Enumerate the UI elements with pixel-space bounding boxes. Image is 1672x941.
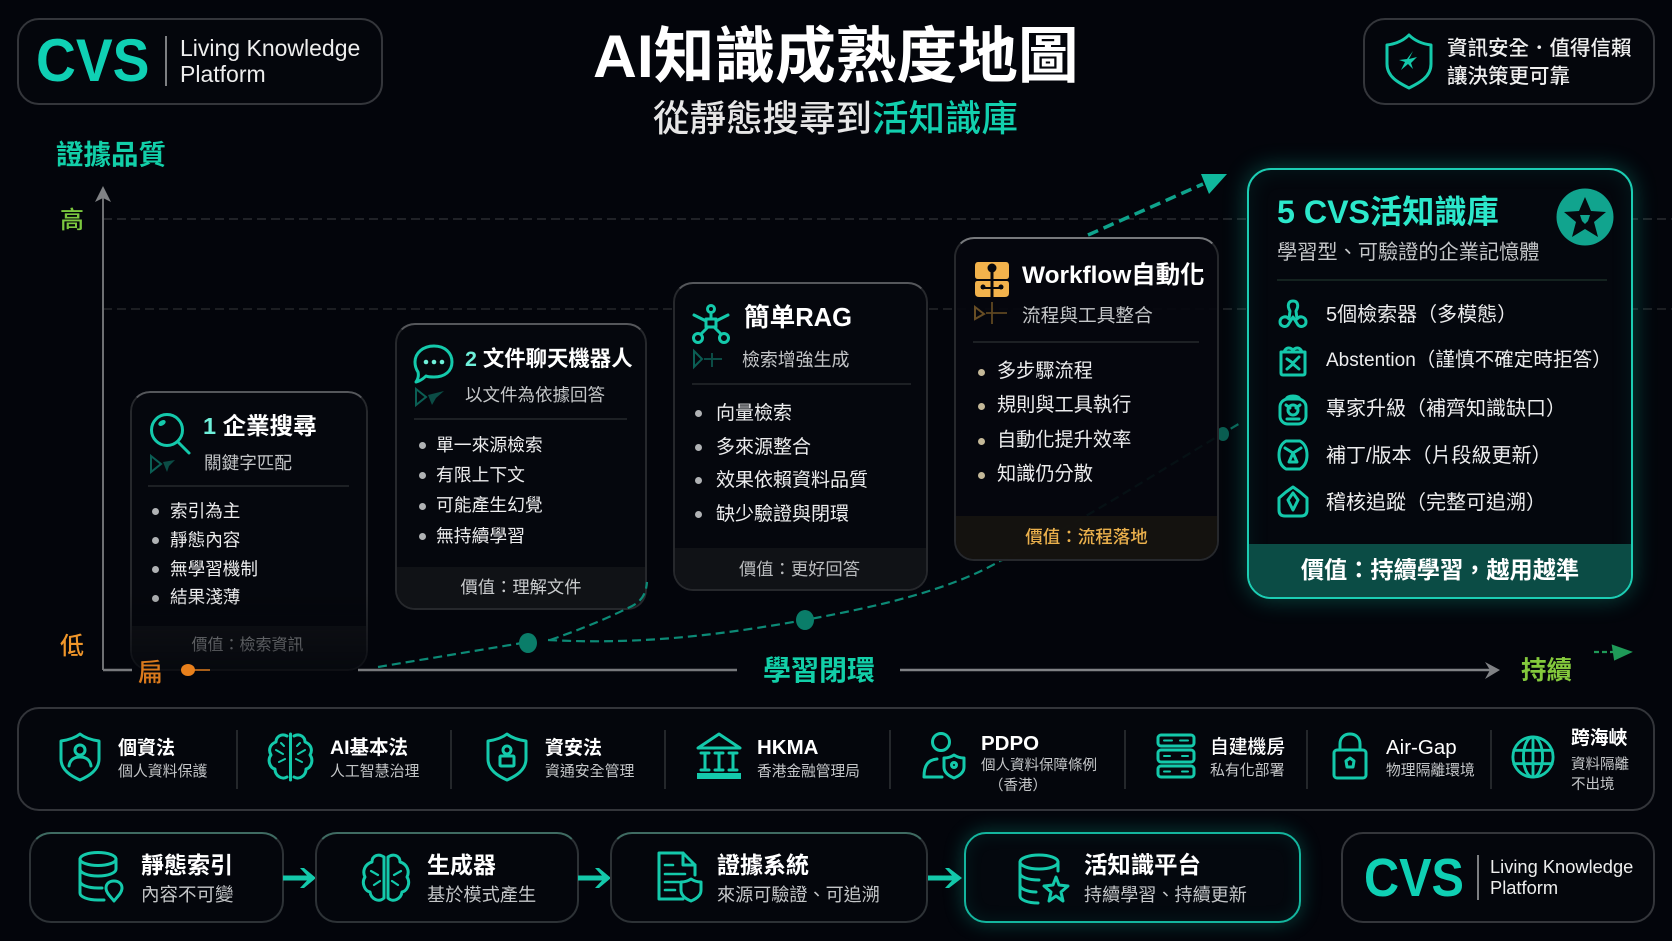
security badge panel — [1363, 18, 1655, 105]
item title: 個資法 — [118, 738, 175, 759]
icon: document with shield — [657, 851, 703, 903]
panel: stage 1 enterprise search — [130, 391, 368, 671]
item title: 資安法 — [545, 738, 602, 759]
panel: stage 3 simple RAG — [673, 282, 928, 591]
value strip: 價值：檢索資訊 — [191, 637, 304, 654]
bullet list — [978, 360, 1131, 485]
item subtitle: 個人資料保護 — [118, 764, 207, 780]
item title: PDPO — [981, 732, 1039, 755]
icon: faint marker — [415, 387, 444, 407]
item subtitle: 私有化部署 — [1210, 763, 1284, 779]
panel: static index — [29, 832, 284, 923]
item subtitle: 資料隔離 — [1571, 757, 1629, 773]
y axis title: 證據品質 — [56, 139, 166, 170]
item subtitle: 來源可驗證、可追溯 — [717, 885, 880, 905]
icon: bank — [696, 732, 742, 779]
icon: shield with lock — [486, 732, 528, 782]
icon: audit frame — [1278, 486, 1308, 518]
icon: globe — [1511, 735, 1555, 779]
bullet list: 單一來源檢索 — [436, 435, 543, 455]
item title: 靜態索引 — [141, 852, 233, 878]
item subtitle: 不出境 — [1571, 777, 1614, 793]
security text — [1447, 37, 1632, 88]
value strip: 價值：更好回答 — [739, 559, 860, 579]
stage subtitle: 檢索增強生成 — [742, 350, 849, 370]
item title: HKMA — [757, 736, 818, 759]
icon: retriever knot — [1278, 300, 1308, 328]
y axis high label: 高 — [60, 207, 84, 234]
item subtitle: 物理隔離環境 — [1386, 763, 1475, 779]
value strip — [397, 567, 645, 608]
upward dashed arrow — [1088, 174, 1227, 235]
bullet list: 向量檢索 — [716, 403, 792, 424]
bullet list — [419, 435, 543, 546]
title: AI知識成熟度地圖 — [593, 22, 1079, 90]
bullet list — [695, 402, 868, 525]
growth curve dashed — [378, 422, 1242, 667]
bullet list: 結果淺薄 — [170, 587, 240, 607]
x axis centre label: 學習閉環 — [763, 655, 875, 686]
x axis end label: 持續 — [1521, 657, 1572, 685]
logo divider — [165, 36, 167, 86]
bullet list: 缺少驗證與閉環 — [716, 504, 849, 525]
compliance: AI basic law — [268, 732, 419, 782]
bullet list: 可能產生幻覺 — [436, 495, 543, 515]
value strip: 價值：流程落地 — [1025, 527, 1148, 547]
logo tagline — [1490, 856, 1633, 898]
feature text: 稽核追蹤（完整可追溯） — [1326, 492, 1546, 514]
icon: expert frame — [1278, 394, 1308, 426]
icon: database with star — [1018, 853, 1070, 905]
compliance: cross-strait — [1509, 725, 1639, 795]
panel: living knowledge platform — [964, 832, 1301, 923]
security text: 讓決策更可靠 — [1447, 65, 1570, 88]
panel: stage 4 workflow automation — [954, 237, 1219, 561]
compliance: cybersecurity law — [486, 732, 634, 782]
value strip — [956, 516, 1217, 559]
item subtitle: 個人資料保障條例 — [981, 758, 1097, 774]
feature: audit trail — [1278, 486, 1546, 518]
logo: CVS Living Knowledge Platform (top left) — [17, 18, 383, 105]
icon: database with pin — [78, 851, 124, 903]
panel: compliance strip — [17, 707, 1655, 811]
x axis arrow — [900, 662, 1500, 679]
bullet list: 無持續學習 — [436, 526, 525, 546]
icon: network nodes — [692, 304, 730, 344]
logo divider — [1477, 855, 1479, 900]
value strip — [675, 548, 926, 589]
security text: 資訊安全．值得信賴 — [1447, 37, 1632, 60]
x axis start label: 扁 — [138, 659, 163, 687]
subtitle: 從靜態搜尋到活知識庫 — [653, 98, 1018, 139]
icon: shield — [1386, 33, 1432, 90]
bullet list — [152, 502, 257, 604]
bullet list: 索引為主 — [170, 501, 240, 521]
bullet list: 規則與工具執行 — [997, 395, 1131, 416]
icon: faint orange marker — [974, 302, 1007, 324]
bullet list: 有限上下文 — [436, 465, 525, 485]
item title: Air-Gap — [1386, 736, 1457, 759]
feature: expert escalation — [1278, 394, 1566, 426]
icon: person with shield — [922, 732, 966, 780]
logo tagline: Platform — [1490, 877, 1558, 898]
logo wordmark: CVS — [36, 27, 150, 94]
icon: patch frame — [1278, 440, 1308, 470]
item subtitle: （香港） — [989, 778, 1047, 794]
stage subtitle: 以文件為依據回答 — [465, 385, 605, 405]
feature: patch version — [1278, 440, 1552, 470]
icon: magnifier — [150, 413, 191, 455]
item title: 活知識平台 — [1084, 852, 1201, 878]
icon: book frame — [1280, 346, 1306, 376]
compliance: personal data law — [60, 732, 207, 782]
small green arrow mark — [1594, 646, 1630, 659]
bullet list: 靜態內容 — [170, 530, 240, 550]
logo: CVS Living Knowledge Platform (bottom right) — [1341, 832, 1655, 923]
stage title: Workflow自動化 — [1022, 262, 1204, 289]
item subtitle — [1571, 755, 1629, 795]
y axis low label: 低 — [60, 633, 84, 660]
icon: server rack — [1156, 733, 1196, 779]
icon: shield with person — [60, 732, 100, 782]
item title: 跨海峽 — [1571, 727, 1627, 748]
icon: orange workflow — [975, 262, 1009, 297]
compliance: PDPO — [922, 732, 1097, 794]
item subtitle: 資通安全管理 — [545, 764, 634, 780]
icon: faint marker — [150, 454, 175, 474]
panel: stage 5 CVS living knowledge base — [1247, 168, 1633, 599]
feature text: 補丁/版本（片段級更新） — [1326, 445, 1552, 467]
stage title: 1 企業搜尋 — [203, 413, 317, 439]
value strip: 價值：理解文件 — [460, 577, 581, 597]
panel: evidence system — [610, 832, 928, 923]
item title: AI基本法 — [330, 737, 408, 759]
item subtitle: 基於模式產生 — [427, 885, 536, 905]
feature list — [1278, 300, 1612, 518]
bullet list: 自動化提升效率 — [997, 430, 1131, 451]
item subtitle: 香港金融管理局 — [757, 764, 860, 780]
icon: brain — [268, 732, 314, 782]
growth nodes — [519, 427, 1229, 653]
panel: generator — [315, 832, 579, 923]
compliance: HKMA — [696, 732, 860, 780]
bullet list: 效果依賴資料品質 — [716, 470, 868, 491]
feature text: Abstention（謹慎不確定時拒答） — [1326, 349, 1612, 371]
arrow: generator to evidence — [578, 867, 612, 889]
item subtitle: 內容不可變 — [141, 884, 234, 905]
stage title: 5 CVS活知識庫 — [1277, 194, 1499, 230]
item title: 自建機房 — [1210, 736, 1285, 757]
item title: 生成器 — [427, 852, 496, 878]
feature: retrievers — [1278, 300, 1517, 328]
feature: abstention — [1280, 346, 1612, 376]
y axis arrow — [95, 186, 111, 670]
logo tagline — [180, 35, 360, 87]
low point marker — [181, 664, 210, 676]
stage title: 簡单RAG — [744, 304, 852, 332]
feature text: 5個檢索器（多模態） — [1326, 304, 1517, 326]
compliance: self-built data centre — [1156, 734, 1285, 779]
feature text: 專家升級（補齊知識缺口） — [1326, 398, 1566, 420]
icon: faint marker — [693, 348, 722, 370]
item subtitle — [981, 757, 1097, 794]
bullet list: 知識仍分散 — [997, 464, 1093, 485]
stage subtitle: 學習型、可驗證的企業記憶體 — [1277, 242, 1539, 264]
compliance: air gap — [1331, 730, 1481, 785]
stage subtitle: 流程與工具整合 — [1022, 305, 1153, 326]
arrow: evidence to platform — [928, 867, 964, 889]
panel: stage 2 document chatbot — [395, 323, 647, 610]
item subtitle: 人工智慧治理 — [330, 764, 419, 780]
icon: brain — [361, 853, 411, 903]
stage subtitle: 關鍵字匹配 — [204, 453, 292, 473]
arrow: index to generator — [283, 867, 317, 889]
x axis left segment — [103, 669, 737, 671]
icon: chat bubble — [414, 344, 454, 384]
value strip — [1249, 544, 1631, 597]
logo wordmark: CVS — [1364, 848, 1464, 908]
bullet list: 多步驟流程 — [997, 361, 1093, 382]
value strip: 價值：持續學習，越用越準 — [1301, 557, 1579, 583]
item subtitle: 持續學習、持續更新 — [1084, 885, 1247, 905]
logo tagline: Living Knowledge — [180, 35, 360, 61]
logo tagline: Living Knowledge — [1490, 856, 1633, 877]
bullet list: 多來源整合 — [716, 437, 811, 458]
item title: 證據系統 — [717, 852, 809, 878]
stage title: 2 文件聊天機器人 — [465, 347, 633, 371]
icon: padlock — [1332, 732, 1368, 780]
bullet list: 無學習機制 — [170, 559, 258, 579]
logo tagline: Platform — [180, 61, 266, 87]
icon: star badge — [1556, 188, 1614, 246]
